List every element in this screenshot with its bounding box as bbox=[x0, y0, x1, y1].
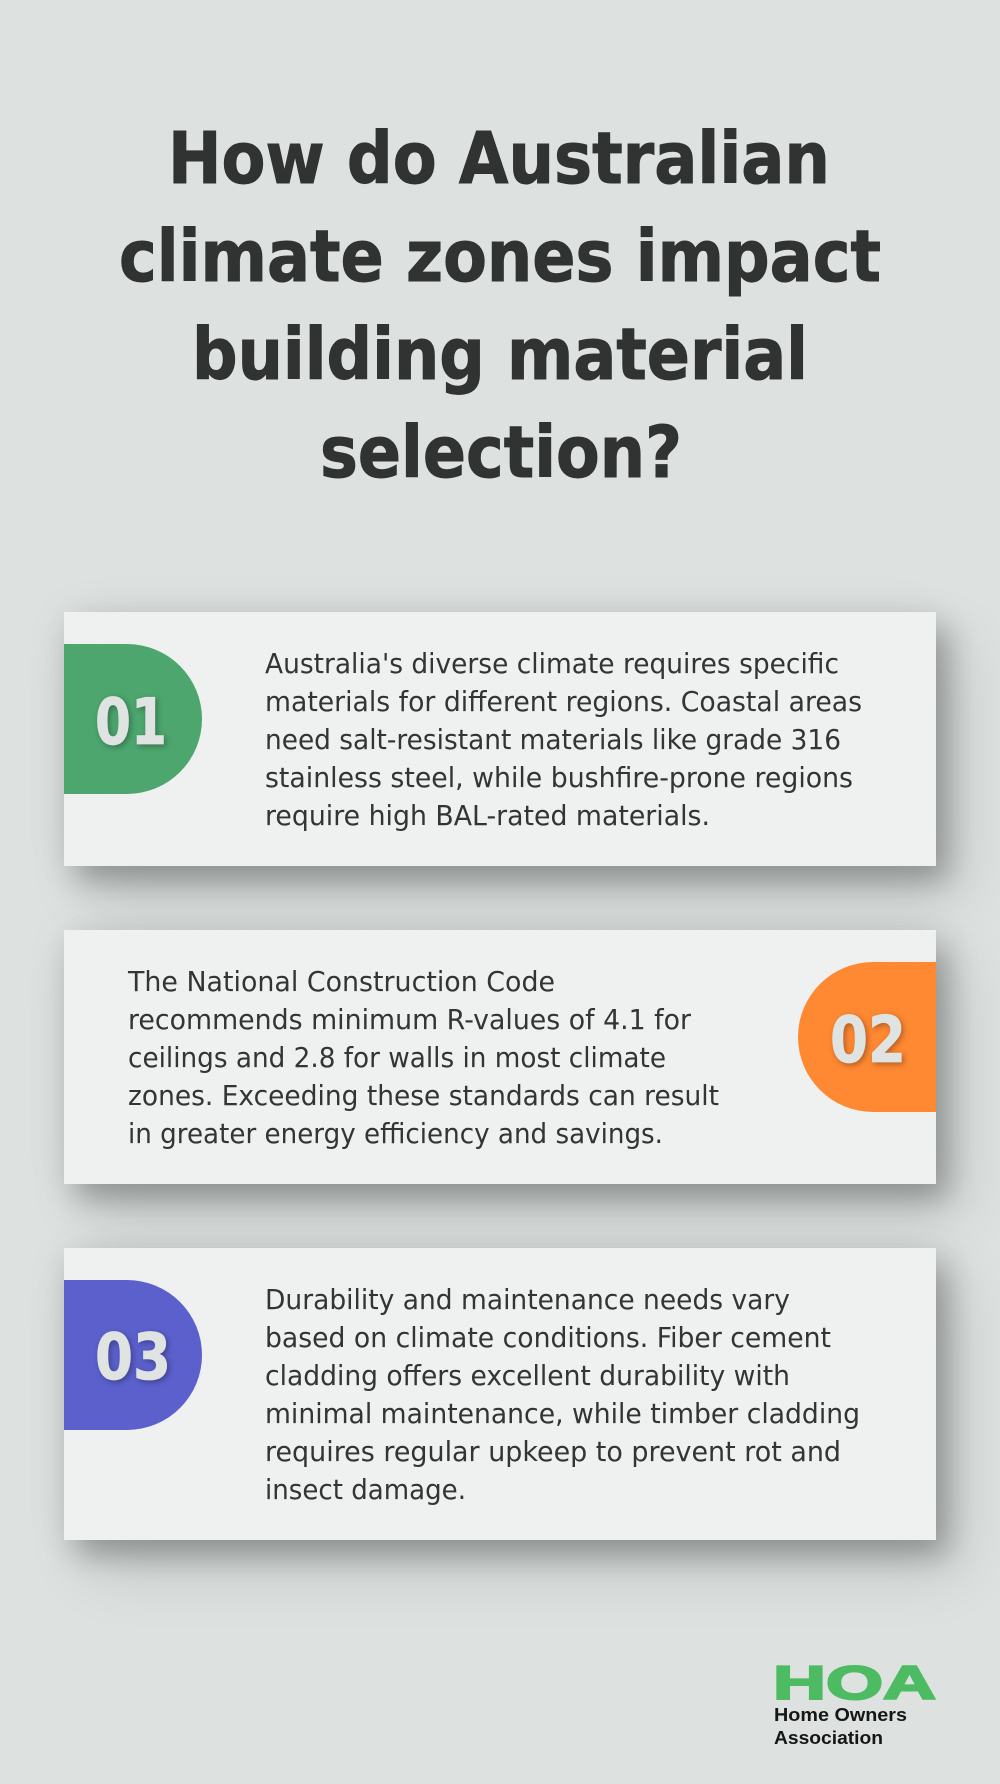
text block: step 03: insect damage. bbox=[265, 1474, 466, 1506]
title: How do Australian bbox=[168, 117, 830, 200]
text block: step 01: materials for different regions. Coastal areas bbox=[265, 686, 862, 718]
logo caption bbox=[774, 1704, 907, 1748]
logo: HOA Home Owners Association bbox=[773, 1656, 936, 1748]
text block: step 02: The National Construction Code bbox=[127, 966, 555, 998]
text block: step 01: stainless steel, while bushfire-prone regions bbox=[265, 762, 853, 794]
logo wordmark HOA: HOA bbox=[773, 1656, 936, 1709]
title: climate zones impact bbox=[119, 215, 881, 298]
badge: 02 orange bbox=[798, 962, 936, 1112]
text block: step 02: ceilings and 2.8 for walls in most climate bbox=[128, 1042, 666, 1074]
text block: step 03: requires regular upkeep to prevent rot and bbox=[265, 1436, 841, 1468]
panel: step 01 bbox=[64, 612, 936, 866]
text block: step 03: based on climate conditions. Fiber cement bbox=[265, 1322, 831, 1354]
number 02: 02 bbox=[830, 1004, 906, 1078]
text block: step 01: need salt-resistant materials like grade 316 bbox=[265, 724, 841, 756]
text block: step 01: require high BAL-rated materials. bbox=[265, 800, 710, 832]
text block: step 02: recommends minimum R-values of 4.1 for bbox=[128, 1004, 692, 1036]
badge: 03 indigo bbox=[64, 1280, 202, 1430]
text block: step 01 bbox=[265, 648, 862, 832]
text block: step 02: zones. Exceeding these standards can result bbox=[128, 1080, 719, 1112]
text block: step 03 bbox=[265, 1284, 860, 1506]
number 01: 01 bbox=[95, 686, 167, 760]
text block: step 03: Durability and maintenance needs vary bbox=[265, 1284, 790, 1316]
title: building material bbox=[192, 313, 808, 396]
text block: step 02: in greater energy efficiency and savings. bbox=[128, 1118, 663, 1150]
title: selection? bbox=[320, 411, 682, 494]
title bbox=[119, 117, 881, 494]
text block: step 03: minimal maintenance, while timber cladding bbox=[265, 1398, 860, 1430]
panel: step 03 bbox=[64, 1248, 936, 1540]
logo caption: Home Owners bbox=[774, 1704, 907, 1725]
number 03: 03 bbox=[95, 1321, 171, 1395]
panel: step 02 bbox=[64, 930, 936, 1184]
logo caption: Association bbox=[774, 1727, 883, 1748]
text block: step 01: Australia's diverse climate requires specific bbox=[265, 648, 839, 680]
badge: 01 green bbox=[64, 644, 202, 794]
text block: step 03: cladding offers excellent durability with bbox=[265, 1360, 790, 1392]
text block: step 02 bbox=[127, 966, 719, 1150]
